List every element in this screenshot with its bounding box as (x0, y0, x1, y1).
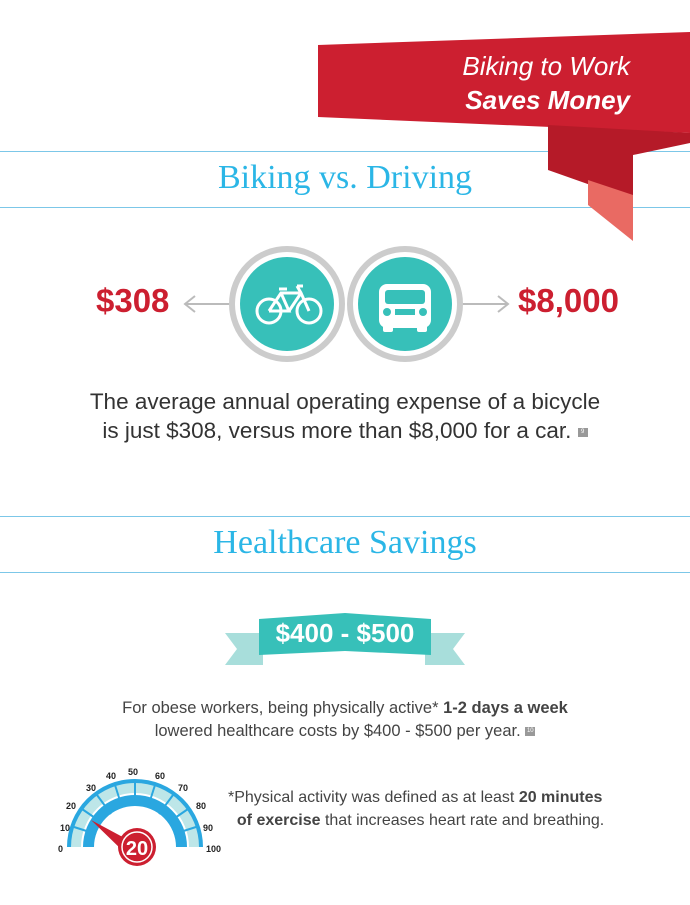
text: expense comparison: 9 (581, 429, 584, 435)
gauge: 20 (126, 838, 148, 860)
title banner: Biking to Work (462, 51, 630, 81)
footnote text: *Physical activity was defined as at least 20 minutes (228, 789, 602, 806)
arrow and price: car (463, 282, 619, 319)
icon: car circle (347, 246, 463, 362)
ribbon: $400 - $500: $400 - $500 (276, 618, 414, 648)
gauge: 0 (58, 844, 63, 854)
ribbon: $400 - $500 (225, 613, 465, 665)
gauge (58, 767, 221, 866)
gauge: 90 (203, 823, 213, 833)
gauge: 70 (178, 783, 188, 793)
arrow and price: bike (96, 282, 229, 319)
text: expense comparison (90, 389, 600, 443)
gauge: 40 (106, 771, 116, 781)
gauge: 30 (86, 783, 96, 793)
icon: bike circle (229, 246, 345, 362)
gauge: 50 (128, 767, 138, 777)
text: obese workers: For obese workers, being physically active* 1-2 days a week (122, 699, 568, 717)
arrow and price: bike: $308 (96, 282, 169, 319)
title banner: Saves Money (465, 85, 630, 115)
arrow and price: car: $8,000 (518, 282, 619, 319)
heading: biking vs driving: Biking vs. Driving (218, 159, 472, 196)
heading: healthcare savings: Healthcare Savings (213, 524, 477, 561)
gauge: 100 (206, 844, 221, 854)
gauge: 20 (66, 801, 76, 811)
text: expense comparison: is just $308, versus more than $8,000 for a car. (102, 418, 571, 443)
title banner (318, 32, 690, 241)
text: obese workers: lowered healthcare costs by $400 - $500 per year. (155, 722, 521, 740)
gauge: 60 (155, 771, 165, 781)
gauge: 80 (196, 801, 206, 811)
text: obese workers: 10 (527, 728, 534, 734)
text: expense comparison: The average annual operating expense of a bicycle (90, 389, 600, 414)
footnote text: of exercise that increases heart rate and breathing. (237, 812, 604, 829)
gauge: 10 (60, 823, 70, 833)
footnote text (228, 789, 604, 829)
text: obese workers (122, 699, 568, 740)
